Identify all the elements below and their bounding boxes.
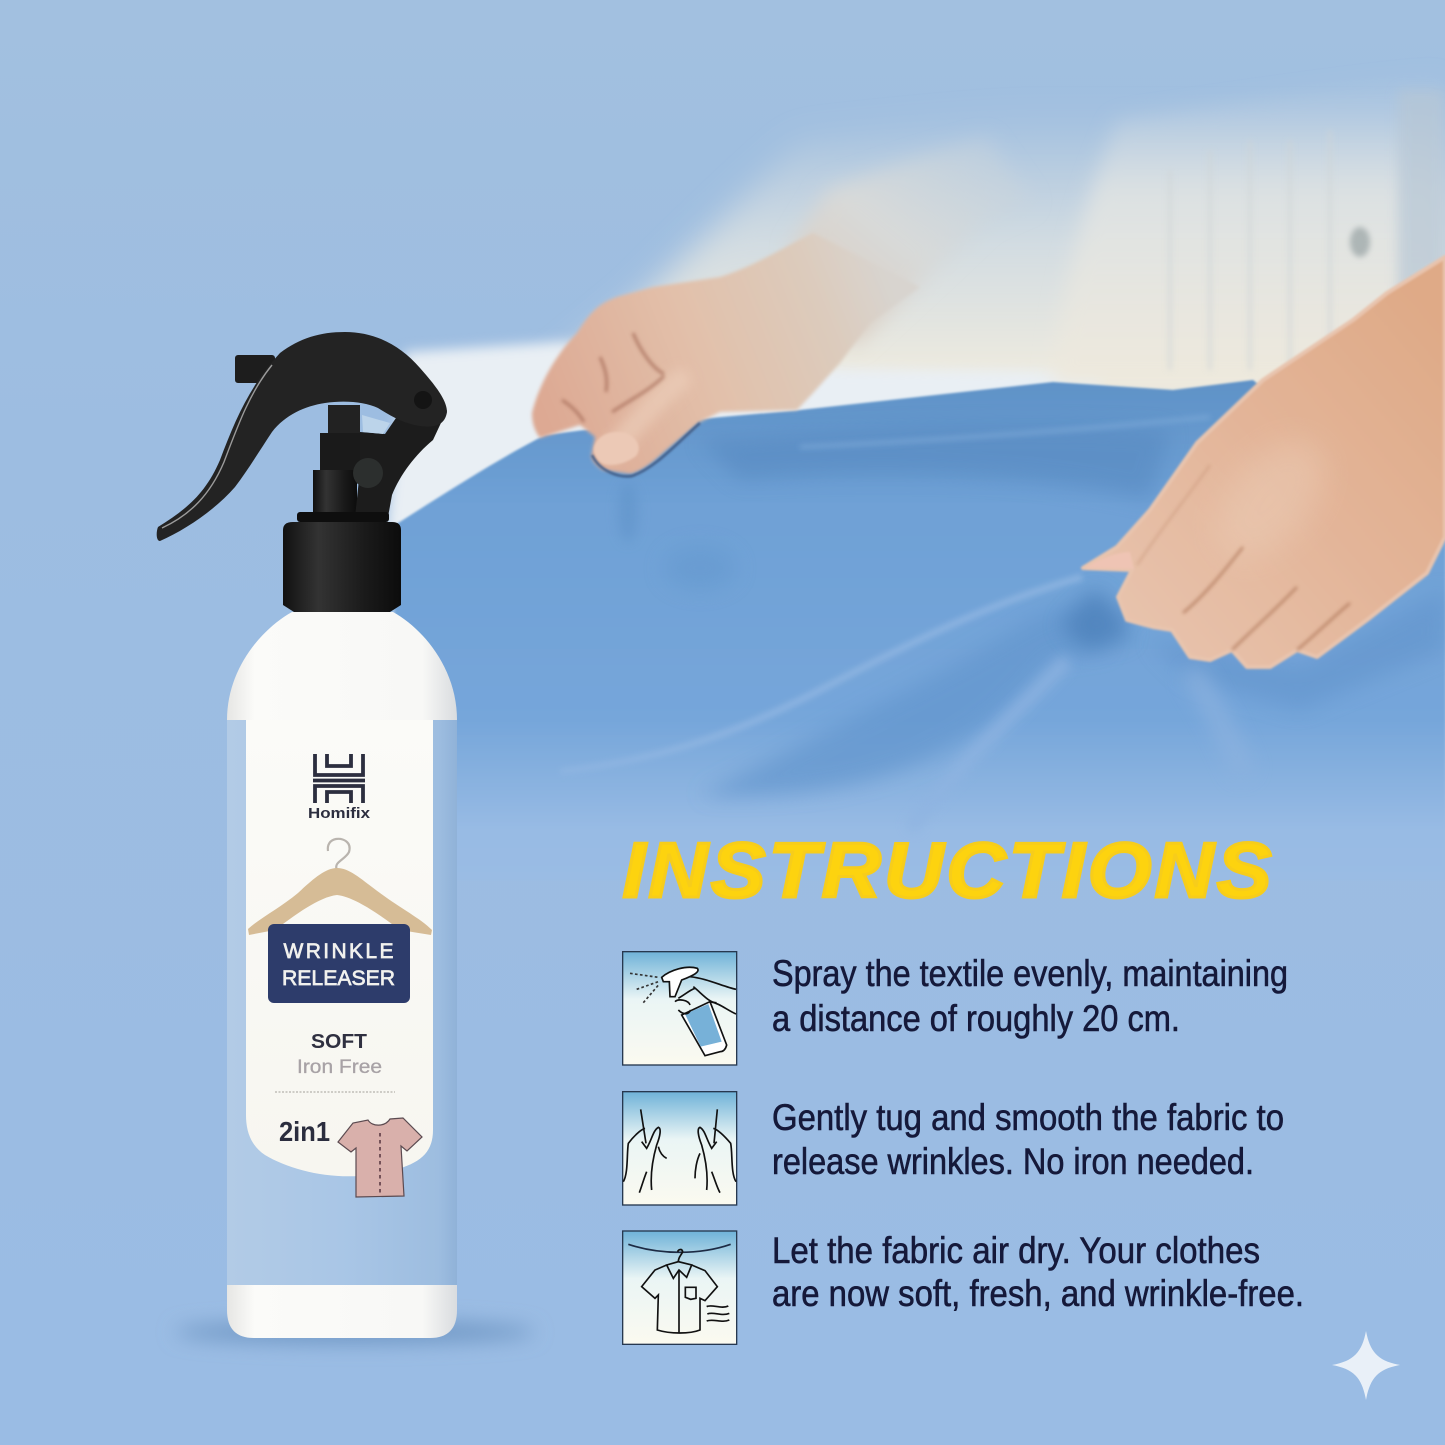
hanger [248, 839, 432, 935]
white label panel [246, 720, 433, 1176]
step 2 text: Gently tug and smooth the fabric to [772, 1097, 1284, 1138]
brand logo [308, 754, 371, 822]
right hand [1083, 257, 1445, 667]
table surface [385, 342, 1100, 545]
brand logo: Homifix [308, 805, 371, 822]
step 3 text [772, 1230, 1304, 1314]
cap [283, 522, 401, 612]
step 1: spray [623, 952, 1288, 1065]
blue label wrap [227, 720, 457, 1285]
blurred person shirt [790, 70, 1445, 385]
soft label: SOFT [311, 1031, 367, 1053]
product name plate: RELEASER [282, 967, 395, 990]
thumb nail [594, 432, 639, 465]
icon: spray bottle [623, 952, 737, 1065]
step 3 text: Let the fabric air dry. Your clothes [772, 1230, 1260, 1271]
product name plate [268, 924, 410, 1003]
2in1 label: 2in1 [279, 1116, 330, 1147]
bottle shadow [175, 1321, 535, 1343]
blurred sleeve [790, 137, 1033, 347]
fabric folds [560, 417, 1445, 830]
step 1 text [772, 953, 1288, 1039]
iron free label: Iron Free [297, 1057, 382, 1078]
icon: t-shirt [338, 1118, 422, 1197]
step 3: air dry [623, 1230, 1304, 1344]
step 2 text [772, 1097, 1284, 1182]
icon: hands [623, 1092, 737, 1205]
icon: sparkle [1332, 1331, 1400, 1400]
trigger sprayer [157, 332, 447, 541]
blue fabric [395, 380, 1445, 880]
step 1 text: Spray the textile evenly, maintaining [772, 953, 1288, 994]
heading: INSTRUCTIONS [623, 827, 1272, 914]
finger creases [562, 333, 664, 422]
step 2: tug fabric [623, 1092, 1284, 1205]
step 3 text: are now soft, fresh, and wrinkle-free. [772, 1273, 1304, 1314]
product bottle [157, 332, 457, 1338]
step 2 text: release wrinkles. No iron needed. [772, 1141, 1254, 1182]
product name plate: WRINKLE [284, 940, 394, 963]
thumb highlight [610, 380, 680, 452]
bottle body [227, 612, 457, 1338]
step 1 text: a distance of roughly 20 cm. [772, 998, 1180, 1039]
icon: shirt on line [623, 1231, 737, 1344]
blurred room backdrop [520, 60, 1445, 420]
left hand [532, 233, 920, 476]
